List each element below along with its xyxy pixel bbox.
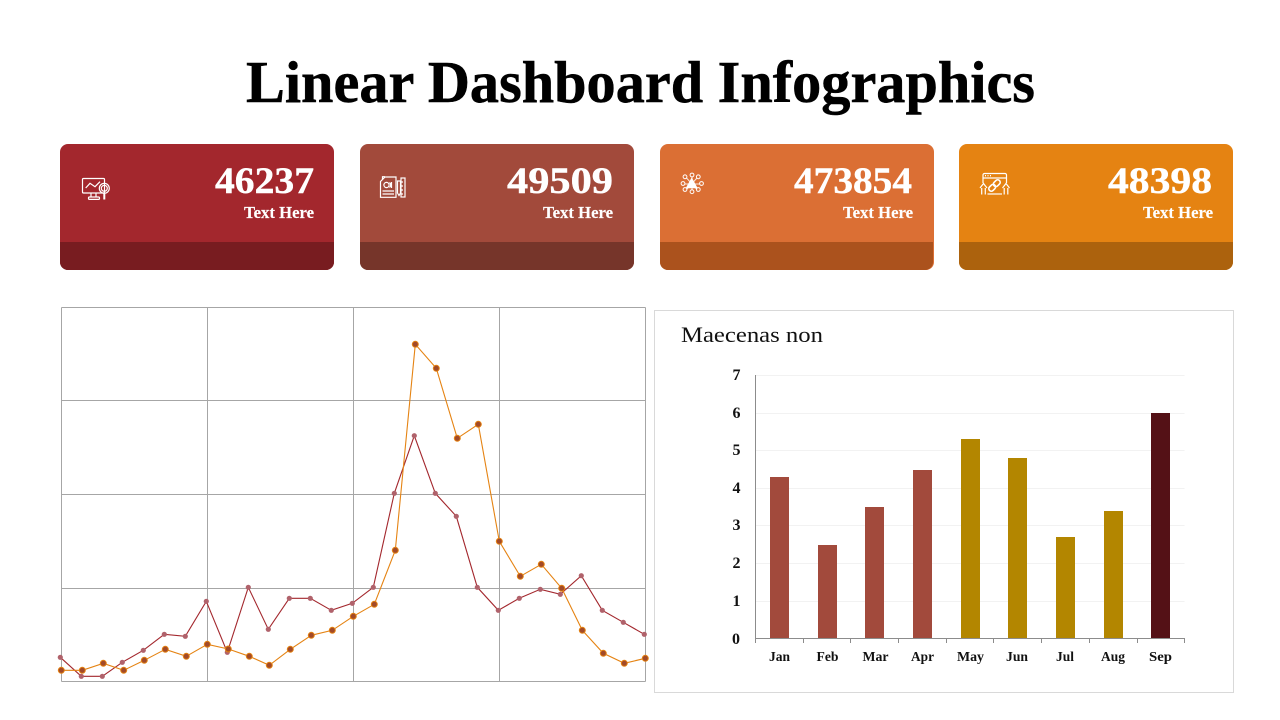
panel: bar chart (654, 310, 1234, 692)
orange data series (58, 341, 648, 673)
y axis labels: 4 (732, 480, 740, 497)
y axis labels: 7 (732, 367, 740, 384)
panel: stat card 2 (360, 144, 634, 270)
bars (770, 413, 1170, 638)
icon: monitor with magnifier (82, 178, 109, 200)
y axis labels: 5 (732, 442, 740, 459)
x axis labels (769, 649, 1172, 664)
x axis labels: Mar (862, 649, 889, 664)
label: Text Here (543, 203, 613, 222)
chart title: Maecenas non (681, 322, 823, 347)
y axis labels: 2 (732, 555, 740, 572)
x axis labels: Sep (1149, 649, 1172, 664)
y axis labels (732, 367, 740, 648)
x axis labels: Jul (1056, 649, 1074, 664)
x axis labels: May (957, 649, 984, 664)
label: Text Here (244, 203, 314, 222)
label: Text Here (1143, 203, 1213, 222)
icon: document and ruler (380, 177, 405, 197)
title: Linear Dashboard Infographics (246, 49, 1035, 115)
value: 473854 (794, 161, 912, 202)
value: 49509 (507, 161, 613, 202)
y axis labels: 1 (732, 593, 740, 610)
y axis labels: 6 (732, 405, 740, 422)
y axis labels: 0 (732, 631, 740, 648)
x axis labels: Jan (769, 649, 790, 664)
value: 46237 (215, 161, 314, 202)
icon: network hub (681, 173, 703, 194)
panel: stat card 3 (660, 144, 934, 270)
x axis labels: Feb (816, 649, 838, 664)
red data series (58, 433, 647, 679)
x axis labels: Jun (1006, 649, 1028, 664)
panel: stat card 1 (60, 144, 334, 270)
x axis labels: Aug (1101, 649, 1125, 664)
panel: stat card 4 (959, 144, 1233, 270)
line chart (58, 308, 648, 682)
x axis labels: Apr (911, 649, 934, 664)
label: Text Here (843, 203, 913, 222)
value: 48398 (1108, 161, 1212, 202)
y axis labels: 3 (732, 517, 740, 534)
icon: browser link with arrows (980, 174, 1010, 194)
axes (755, 375, 1185, 643)
